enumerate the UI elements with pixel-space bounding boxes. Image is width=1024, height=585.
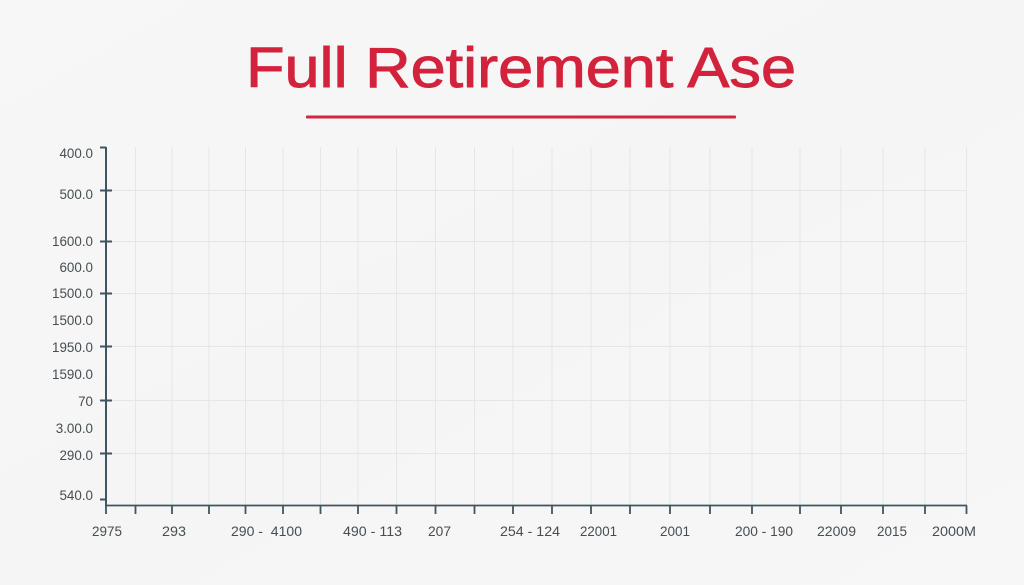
y axis line and ticks [100, 147, 112, 506]
gridlines [112, 147, 967, 505]
y axis labels: 1500.0 [52, 313, 93, 328]
x axis labels: 2001 [660, 524, 690, 539]
x axis labels [92, 524, 976, 539]
chart [52, 146, 976, 539]
y axis labels: 500.0 [59, 187, 93, 202]
y axis labels: 1950.0 [52, 340, 93, 355]
x axis labels: 2000M [932, 524, 976, 539]
x axis labels: 2015 [877, 524, 907, 539]
y axis [52, 146, 112, 506]
y axis labels: 3.00.0 [56, 421, 93, 436]
y axis labels: 540.0 [59, 488, 93, 503]
x axis labels: 290 - 4100 [231, 524, 302, 539]
x axis labels: 207 [428, 524, 451, 539]
title underline [306, 116, 736, 118]
x axis [92, 506, 976, 539]
x axis labels: 490 - 113 [343, 524, 402, 539]
x axis labels: 254 - 124 [500, 524, 560, 539]
y axis labels: 1590.0 [52, 367, 93, 382]
x axis labels: 22001 [580, 524, 617, 539]
x axis labels: 2975 [92, 524, 122, 539]
x axis line and ticks [105, 506, 967, 514]
x axis labels: 22009 [817, 524, 856, 539]
y axis labels: 600.0 [59, 260, 93, 275]
x axis labels: 200 - 190 [735, 524, 793, 539]
x axis labels: 293 [162, 524, 186, 539]
y axis labels: 290.0 [59, 448, 93, 463]
y axis labels: 70 [78, 394, 93, 409]
y axis labels: 400.0 [59, 146, 93, 161]
y axis labels: 1600.0 [52, 234, 93, 249]
y axis labels [52, 146, 93, 503]
title: Full Retirement Ase [246, 36, 796, 100]
y axis labels: 1500.0 [52, 286, 93, 301]
